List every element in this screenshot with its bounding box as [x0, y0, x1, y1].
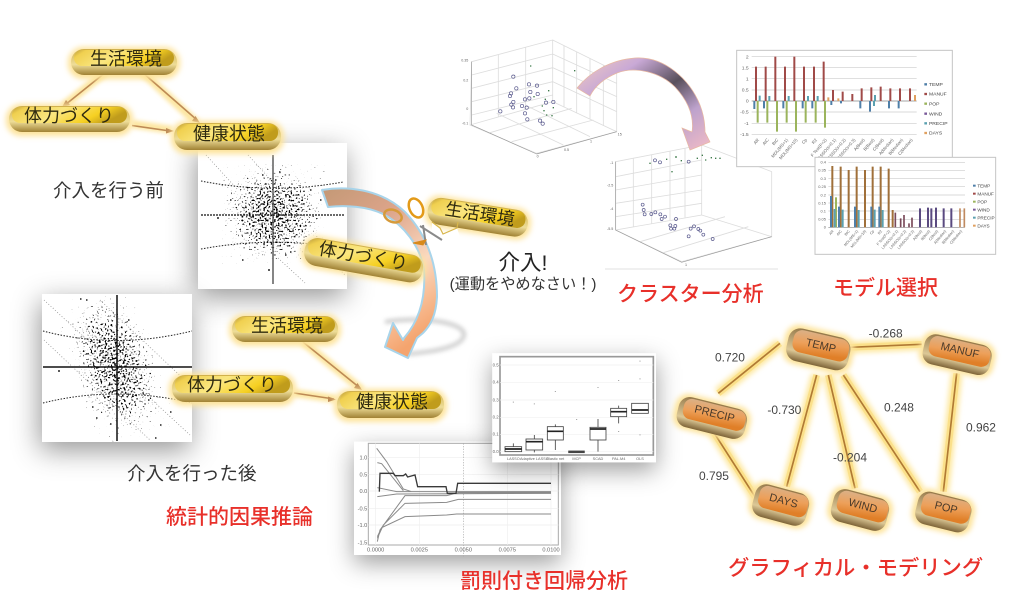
chart: bar chart of selection frequency: LASSO(s=0.1) — [881, 229, 899, 250]
chart: 3D scatter after clustering: -5.5 — [607, 227, 613, 231]
chart: box plot comparison: PAL.M4 — [612, 457, 626, 461]
chart: bar chart of model coefficients: LASSO(s=0.2) — [825, 137, 847, 162]
chart: box plot comparison — [492, 353, 656, 462]
chart: bar chart of model coefficients: B(Best) — [862, 137, 876, 152]
pill: 生活環境 (being cut) — [422, 194, 533, 242]
chart: bar chart of selection frequency: AIC — [836, 229, 843, 237]
chart: 3D scatter before clustering: -0.1 — [462, 121, 468, 125]
chart: box plot comparison: LASSO — [507, 457, 520, 461]
text: intervention: 介入! — [499, 251, 547, 275]
arrows between factors — [62, 72, 200, 134]
node: PRECIP — [670, 391, 754, 445]
graphical model network — [670, 322, 998, 538]
chart: bar chart of selection frequency: 0.35 — [818, 168, 827, 173]
chart: box plot comparison: MCP — [572, 457, 581, 461]
node: POP — [909, 486, 978, 538]
pill: 健康状態 (before): 健康状態 — [193, 124, 265, 144]
chart: bar chart of model coefficients: LASSO(s=0.1) — [815, 137, 837, 162]
pill: 生活環境 (after): 生活環境 — [251, 316, 323, 336]
chart: lasso coefficient paths: 0.0000 — [367, 547, 384, 553]
chart: bar chart of selection frequency: 0.1 — [820, 208, 827, 213]
cut edge of pill — [432, 222, 460, 246]
chart: bar chart of model coefficients: 0 — [746, 99, 749, 105]
pill: 体力づくり (tilted) — [299, 234, 428, 288]
chart: 3D scatter after clustering: -4 — [610, 207, 613, 211]
chart: box plot comparison: 0.4 — [493, 380, 499, 385]
edge weight labels: -0.268 — [869, 326, 903, 340]
chart: bar chart of model coefficients: AR — [752, 137, 760, 145]
legend: chart 1: POP — [929, 101, 940, 107]
chart: bar chart of model coefficients: LASSO(s=0.3) — [835, 137, 857, 162]
arrow: curved intervention arrow — [322, 188, 437, 358]
chart: bar chart of selection frequency: C(Best) — [928, 229, 939, 241]
chart: bar chart of model coefficients: A(Best) — [853, 137, 866, 152]
chart: bar chart of model coefficients: 1.5 — [742, 65, 749, 71]
legend: chart 2: DAYS — [977, 223, 990, 228]
chart: 3D scatter before clustering — [461, 40, 622, 158]
legend: chart 1: MANUF — [929, 92, 947, 98]
chart: box plot comparison: 0.0 — [493, 449, 499, 454]
pill: 体力づくり: 体力づくり — [24, 106, 114, 126]
legend: chart 2: MANUF — [977, 191, 994, 196]
node: TEMP: TEMP — [805, 337, 837, 355]
chart: lasso coefficient paths — [354, 442, 561, 557]
pill: 健康状態 (after): 健康状態 — [356, 392, 428, 412]
chart: bar chart of selection frequency: 0.4 — [820, 160, 827, 165]
edge weight labels: -0.204 — [833, 450, 867, 464]
caption: before intervention: 介入を行う前 — [53, 180, 164, 201]
heading: cluster analysis: クラスター分析 — [617, 283, 764, 306]
arrows after intervention — [294, 342, 362, 402]
chart: bar chart of selection frequency: C(Median) — [949, 229, 963, 245]
chart: bar chart of selection frequency: LASSO(s=0.2) — [889, 229, 907, 250]
chart: lasso coefficient paths: -1.0 — [358, 523, 367, 529]
chart: bar chart of model coefficients: C(Median) — [897, 137, 914, 156]
edge weight labels: 0.795 — [699, 469, 729, 483]
chart: bar chart of model coefficients: 0.5 — [742, 88, 749, 94]
chart: bar chart of model coefficients: -0.5 — [740, 110, 749, 116]
chart: 3D scatter after clustering: -2.5 — [607, 184, 613, 188]
chart: box plot comparison: Elastic net — [546, 457, 565, 461]
chart: 3D scatter before clustering: 0 — [537, 154, 539, 158]
legend: chart 1: DAYS — [929, 131, 943, 137]
chart: bar chart of model coefficients: MDL(MS=1) — [770, 137, 789, 159]
intervention arrow shadow — [385, 320, 464, 354]
chart: bar chart of selection frequency: B(Best) — [920, 229, 931, 241]
chart: bar chart of model coefficients: C(Best) — [872, 137, 885, 152]
chart: bar chart of selection frequency: Cp — [869, 229, 875, 236]
chart: 3D scatter before clustering: 0.5 — [564, 148, 569, 152]
network edges — [713, 343, 957, 497]
edge weight labels: 0.962 — [966, 421, 996, 435]
chart: bar chart of selection frequency: 0.25 — [818, 184, 827, 189]
pill: 体力づくり (after): 体力づくり — [187, 375, 277, 395]
chart: bar chart of model coefficients: 1 — [746, 76, 749, 82]
chart: bar chart of model coefficients: MDL(MS=10) — [778, 137, 799, 160]
chart: box plot comparison: 0.3 — [493, 397, 499, 402]
legend: chart 2: PRECIP — [977, 215, 995, 220]
pill: 生活環境 (after) — [229, 314, 341, 346]
bars: tall series — [832, 166, 893, 227]
chart: bar chart of selection frequency: 0.15 — [818, 200, 827, 205]
arrow: purple curved arrow — [577, 58, 710, 150]
node: DAYS: DAYS — [768, 492, 799, 511]
pill: 生活環境 (being cut): 生活環境 — [444, 199, 516, 229]
node: WIND — [824, 483, 896, 537]
chart: 3D scatter after clustering: 1 — [685, 263, 687, 267]
chart: lasso coefficient paths: 0.0025 — [411, 547, 428, 553]
pill: 健康状態 (after) — [334, 389, 447, 422]
chart: bar chart of model coefficients: -1.5 — [740, 132, 749, 138]
node: TEMP — [779, 322, 857, 377]
chart: bar chart of model coefficients: Cp — [801, 137, 808, 145]
edge weight labels: 0.720 — [715, 350, 745, 364]
legend: chart 2: POP — [977, 199, 987, 204]
chart: lasso coefficient paths: 0.0075 — [499, 547, 516, 553]
legend: chart 2: TEMP — [977, 183, 990, 188]
chart: 3D scatter before clustering: 1 — [590, 140, 592, 144]
chart: bar chart of selection frequency: MDL(MS=10) — [850, 229, 867, 249]
causal diagram before intervention — [6, 47, 200, 136]
edge weight labels: -0.730 — [767, 403, 802, 417]
chart: lasso coefficient paths: 0.0100 — [542, 547, 560, 553]
chart: bar chart of selection frequency: 0 — [824, 225, 827, 230]
node: PRECIP: PRECIP — [693, 403, 736, 425]
text: stop exercising: (運動をやめなさい！) — [450, 276, 596, 293]
heading: penalized regression: 罰則付き回帰分析 — [460, 570, 628, 593]
heading: graphical modeling: グラフィカル・モデリング — [728, 555, 983, 580]
chart: bar chart of model coefficients: 2 — [746, 54, 749, 60]
chart: bar chart of model coefficients: BIC — [771, 137, 779, 146]
chart: bar chart of model coefficients: B(Median) — [887, 137, 904, 156]
chart: bar chart of selection frequency: 0.3 — [820, 176, 827, 181]
node: MANUF — [916, 329, 998, 381]
scatter plot after intervention — [42, 280, 192, 450]
caption: after intervention: 介入を行った後 — [127, 463, 257, 484]
chart: 3D scatter after clustering: -1 — [610, 161, 613, 165]
chart: bar chart of selection frequency: A(Best) — [912, 229, 923, 241]
node: POP: POP — [933, 500, 959, 517]
chart: bar chart of selection frequency: MDL(MS=1) — [843, 229, 859, 247]
scatter plot before intervention — [198, 143, 347, 289]
node: MANUF: MANUF — [939, 341, 980, 361]
causal diagram after intervention — [169, 314, 447, 422]
chart: bar chart of selection frequency: A(Median) — [933, 229, 947, 245]
edge weight labels — [699, 326, 996, 483]
chart: lasso coefficient paths: 1.0 — [359, 455, 367, 461]
chart: bar chart of selection frequency: B(Median) — [941, 229, 955, 245]
heading: model selection: モデル選択 — [833, 276, 938, 300]
chart: 3D scatter before clustering: 0 — [466, 107, 468, 111]
chart: bar chart of model coefficients: R2 — [811, 137, 818, 145]
chart: bar chart of selection frequency: LASSO(s=0.3) — [897, 229, 915, 250]
pill: 体力づくり (after) — [169, 373, 296, 406]
legend: chart 1 — [924, 82, 948, 137]
chart: bar chart of selection frequency: R2 — [877, 229, 883, 236]
pill: 生活環境 — [68, 47, 180, 79]
chart: lasso coefficient paths: -0.5 — [358, 506, 367, 512]
legend: chart 2: WIND — [977, 207, 990, 212]
chart: bar chart of selection frequency — [815, 157, 996, 254]
chart: box plot comparison: 0.5 — [493, 362, 499, 367]
chart: box plot comparison: 0.1 — [493, 432, 499, 437]
divider under 3D scatter — [605, 268, 778, 270]
pill: 健康状態 (before) — [171, 121, 284, 154]
legend: chart 2 — [973, 183, 995, 228]
pill: 体力づくり — [6, 104, 133, 136]
heading: statistical causal inference: 統計的因果推論 — [166, 506, 313, 529]
chart: box plot comparison: Adaptive LASSO — [520, 457, 549, 461]
chart: lasso coefficient paths: 0.0050 — [455, 547, 472, 553]
chart: bar chart of selection frequency: 0.05 — [818, 217, 827, 222]
chart: bar chart of selection frequency: AR — [828, 229, 835, 236]
chart: bar chart of model coefficients: A(Median) — [878, 137, 895, 156]
chart: lasso coefficient paths: 0.5 — [359, 472, 367, 478]
chart: bar chart of selection frequency: 0.2 — [820, 192, 827, 197]
legend: chart 1: WIND — [929, 111, 943, 117]
chart: bar chart of model coefficients — [737, 50, 952, 167]
chart: lasso coefficient paths: -1.5 — [358, 540, 367, 546]
legend: chart 1: TEMP — [929, 82, 944, 88]
pill: 生活環境: 生活環境 — [90, 49, 162, 69]
chart: bar chart of model coefficients: -1 — [744, 121, 749, 127]
chart: 3D scatter before clustering: 0.35 — [461, 59, 468, 63]
chart: bar chart of selection frequency: F Test(F=2) — [876, 229, 891, 246]
chart: bar chart of model coefficients: AIC — [761, 137, 770, 146]
chart: 3D scatter after clustering — [607, 145, 772, 267]
legend: chart 1: PRECIP — [929, 121, 948, 127]
edge weight labels: 0.248 — [884, 400, 914, 414]
pill: 体力づくり (tilted): 体力づくり — [317, 238, 409, 274]
chart: box plot comparison: 0.2 — [493, 415, 499, 420]
chart: 3D scatter before clustering: 0.2 — [463, 79, 468, 83]
chart: bar chart of selection frequency: BIC — [844, 229, 851, 237]
node: DAYS — [745, 478, 816, 532]
chart: 3D scatter before clustering: 15 — [618, 132, 622, 136]
chart: bar chart of model coefficients: F Test(F=2) — [810, 137, 828, 158]
chart: box plot comparison: SCAD — [593, 457, 604, 461]
icon: scissors — [382, 196, 442, 245]
node: WIND: WIND — [847, 497, 878, 516]
chart: box plot comparison: OLS — [636, 457, 644, 461]
chart: lasso coefficient paths: 0.0 — [359, 489, 367, 495]
bars: MANUF series — [756, 57, 910, 101]
